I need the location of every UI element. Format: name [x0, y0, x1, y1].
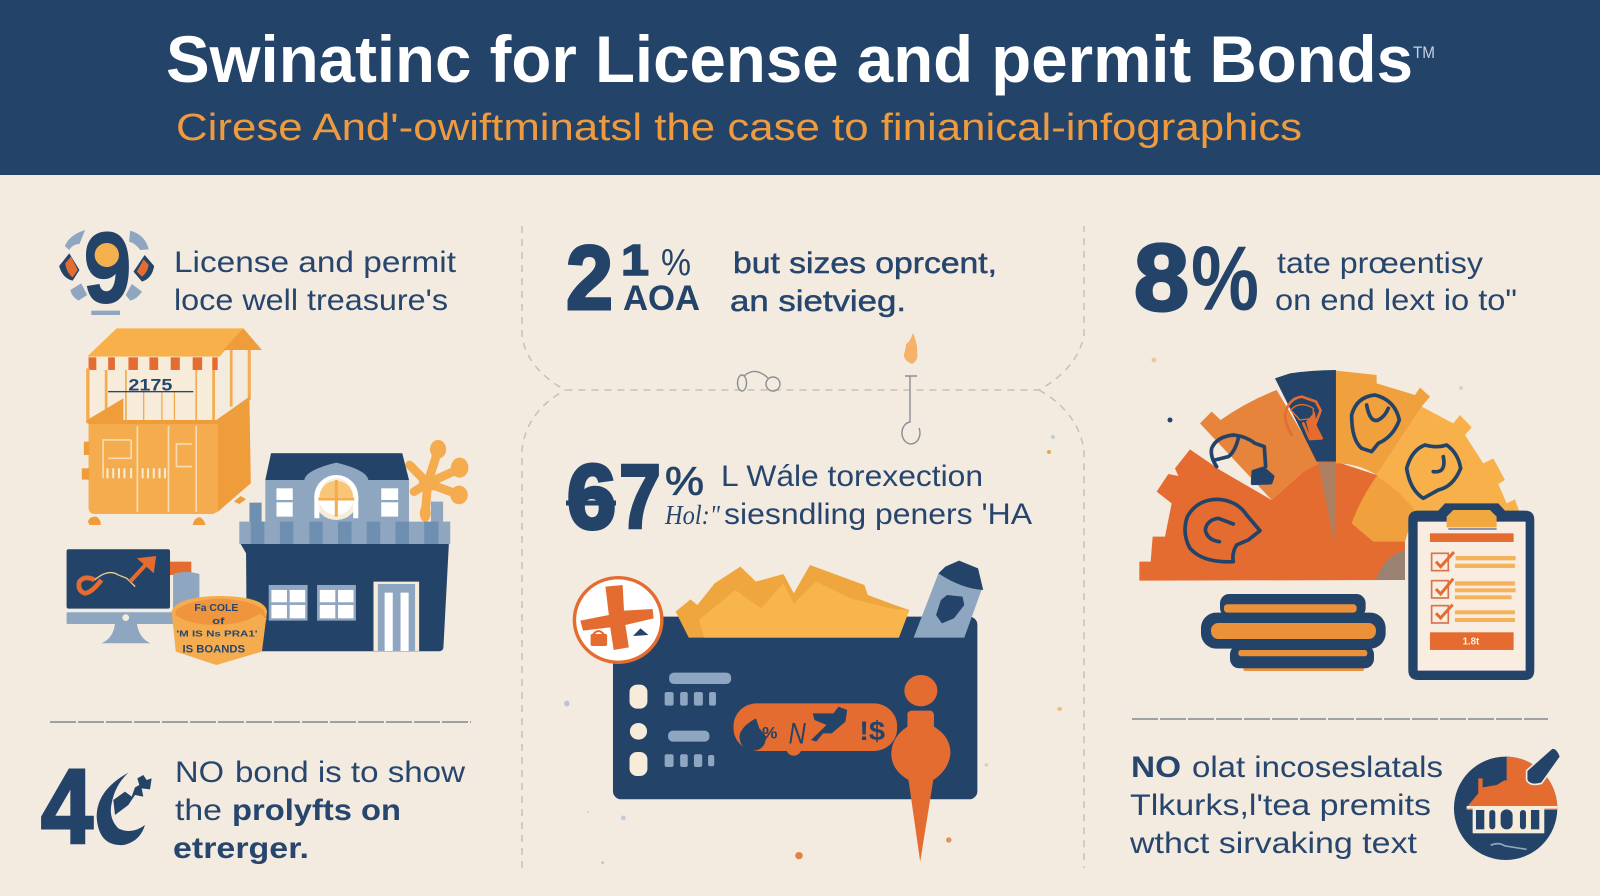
decorative flame and hook — [902, 333, 920, 444]
illustration: bank building — [239, 453, 450, 651]
stat: twenty one percent: 1 — [621, 236, 649, 285]
stat: twenty one percent — [566, 228, 700, 329]
trademark: TM — [1413, 43, 1435, 62]
stat: sixty seven percent: 7 — [619, 447, 661, 548]
text: l wale torexection: L Wále torexection — [721, 460, 983, 493]
stat: twenty one percent: AOA — [623, 279, 700, 318]
money spilling from card — [676, 565, 909, 638]
illustration: stacked bars — [1201, 594, 1386, 671]
icon: house seal with pen — [1454, 748, 1561, 860]
text: no bond is to show: etrerger. — [173, 832, 309, 865]
text: no olat incoseslatals: olat incoseslatals — [1192, 751, 1443, 784]
header banner — [0, 0, 1600, 175]
illustration: coin stack label — [172, 596, 267, 665]
illustration: bond card — [564, 561, 1061, 864]
mid orange wedge — [1200, 390, 1320, 500]
navy wedge — [1275, 370, 1336, 462]
card body — [613, 617, 977, 799]
text: loce well treasure's: loce well treasure's — [174, 284, 448, 317]
text: but sizes oprcent: but sizes oprcent, — [733, 247, 997, 280]
text: no olat incoseslatals — [1129, 751, 1443, 860]
stat: twenty one percent: % — [661, 242, 691, 284]
orange bond pill — [734, 703, 897, 756]
orange bond pill: % — [762, 724, 777, 742]
grey wedges — [1318, 462, 1336, 544]
stat: sixty seven percent: 6 — [567, 447, 616, 548]
text: on end lext io to: on end lext io to" — [1275, 284, 1517, 317]
speckles — [564, 701, 1061, 864]
animal emblems — [1185, 395, 1461, 562]
card row icons and bars — [630, 673, 731, 776]
text: no bond is to show: NO — [175, 756, 224, 789]
illustration: asterisk ornament — [410, 440, 468, 522]
orange pin figure — [891, 675, 950, 862]
panel: center column — [564, 228, 1061, 864]
illustration: coin stack label: 'M IS Ns PRA1' — [176, 629, 258, 639]
stat: sixty seven percent: % — [665, 460, 704, 504]
text: an sietvieg: an sietvieg. — [730, 285, 906, 318]
text: hol siesndling peners: siesndling peners 'HA — [724, 498, 1032, 531]
orange bond pill: N — [789, 717, 807, 750]
icon: number nine badge — [59, 213, 154, 324]
text: no bond is to show: the — [175, 794, 222, 827]
text: no olat incoseslatals: Tlkurks,l'tea premits — [1130, 789, 1431, 822]
illustration: coin stack label: IS BOANDS — [183, 644, 245, 656]
text: no olat incoseslatals: NO — [1131, 751, 1181, 784]
text: tate prœentisy: tate prœentisy — [1277, 247, 1483, 280]
text: license and permit: License and permit — [174, 246, 457, 279]
section dividers — [50, 226, 1548, 868]
illustration: coin stack label: of — [212, 615, 226, 626]
light amber wedge — [1377, 407, 1519, 512]
stat: twenty one percent: 2 — [566, 228, 613, 329]
stat: eight percent: 8 — [1134, 225, 1189, 331]
illustration: clipboard checklist — [1408, 503, 1534, 680]
stat: sixty seven percent — [566, 447, 704, 548]
text: no olat incoseslatals: wthct sirvaking text — [1129, 827, 1418, 860]
panel: left column — [41, 213, 468, 866]
icon: orange cross badge — [574, 578, 662, 662]
text: hol siesndling peners: Hol:" — [664, 500, 721, 530]
amber wedge — [1336, 371, 1430, 475]
icon: number nine badge: 9 — [84, 213, 131, 324]
panel: right column — [564, 225, 1561, 860]
orange bond pill: !$ — [859, 715, 885, 746]
title: Swinatinc for License and permit Bonds — [166, 22, 1413, 96]
illustration: clipboard checklist: 1.8t — [1463, 636, 1480, 647]
inner amber wedge — [1352, 476, 1415, 542]
text: no bond is to show — [173, 756, 465, 865]
stat: eight percent: % — [1191, 228, 1259, 330]
illustration: kiosk — [82, 328, 262, 525]
decorative loop — [738, 371, 780, 391]
illustration: kiosk: 2175 — [128, 376, 172, 395]
speckles — [564, 358, 1463, 711]
text: no bond is to show: bond is to show — [235, 756, 465, 789]
illustration: coin stack label: Fa COLE — [194, 603, 239, 614]
illustration: fan gauge — [1139, 370, 1519, 581]
subtitle: Cirese And'-owiftminatsl the case to finianical-infographics — [176, 107, 1302, 149]
cup on card — [914, 561, 983, 638]
stat: forty with crescent — [41, 748, 152, 866]
illustration: monitor with chart — [67, 549, 199, 643]
text: no bond is to show: prolyfts on — [232, 794, 401, 827]
stat: forty with crescent: 4 — [41, 748, 93, 866]
orange main wedge — [1139, 449, 1410, 581]
stat: eight percent — [1134, 225, 1259, 331]
